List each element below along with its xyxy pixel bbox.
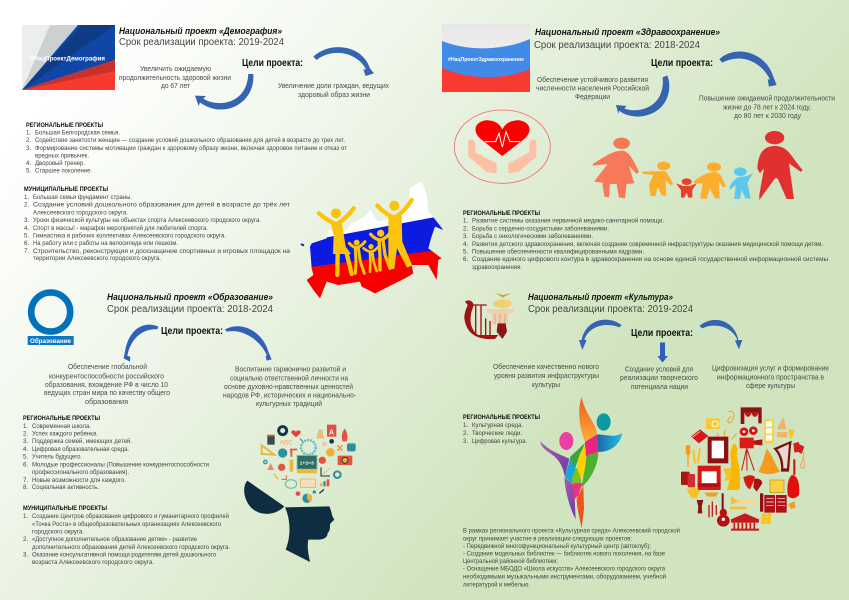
regional projects list: 2.	[23, 431, 28, 438]
goal: left: Обеспечение устойчивого развития	[537, 75, 648, 84]
municipal projects list: «Доступное дополнительное образование детям» - развитие	[32, 536, 198, 543]
illustration: culture icons circle	[681, 407, 805, 531]
goal: left: Обеспечение глобальной	[68, 362, 147, 371]
regional projects list: 1.	[463, 218, 468, 225]
municipal projects list: Спорт в массы! - марафон мероприятий для любителей спорта.	[33, 225, 208, 232]
goal: right: культурных традиций	[256, 399, 322, 408]
regional projects list: 3.	[26, 145, 31, 152]
municipal projects list: территории Алексеевского городского округа.	[33, 255, 161, 262]
regional projects list: Развития детского здравоохранения, включая создание современной инфраструктуры оказания медицинской помощи детям.	[472, 241, 823, 248]
regional projects list: 1.	[463, 422, 468, 429]
illustration: family	[593, 131, 803, 200]
regional projects list: 4.	[26, 160, 31, 167]
municipal projects list: Создание условий дошкольного образования для детей в возрасте до трёх лет	[33, 202, 290, 209]
regional projects list: 3.	[463, 233, 468, 240]
regional projects list: 6.	[463, 256, 468, 263]
goal: right: социально ответственной личности на	[230, 374, 349, 382]
arrow: to right goal	[699, 320, 742, 349]
municipal projects list: возраста Алексеевского городского округа.	[32, 559, 154, 566]
goal: left	[44, 362, 170, 406]
regional projects list: Цифровая культура.	[472, 438, 527, 445]
goals heading: Цели проекта:	[242, 58, 303, 69]
arrow: to right goal	[719, 51, 777, 87]
text: culture environment projects: округ принимает участие в реализации следующих проектов:	[463, 536, 632, 542]
icon: culture logo lyre and column	[464, 293, 514, 339]
goal: right	[278, 81, 389, 99]
goal: right	[699, 94, 835, 120]
municipal projects list: 7.	[24, 248, 29, 255]
regional projects list: 3.	[463, 438, 468, 445]
goal: middle	[620, 364, 698, 391]
municipal projects list: Оказание консультативной помощи родителям детей дошкольного	[32, 552, 217, 558]
regional projects list: 4.	[463, 241, 468, 248]
arrow: to right goal	[313, 47, 374, 76]
municipal projects list: На работу или с работы на велосипеде или пешком.	[33, 240, 178, 247]
goal: left	[493, 362, 599, 389]
goal: left: культуры	[532, 380, 560, 389]
goal: left: численности населения Российской	[536, 84, 649, 92]
illustration: open head with education icons: A	[329, 430, 334, 437]
regional projects list: 5.	[23, 454, 28, 460]
text: culture environment projects: необходимыми музыкальными инструментами, оборудованием, учебной	[463, 574, 667, 581]
text: culture environment projects: - Передвижной многофункциональный культурный центр (автоклуб);	[463, 543, 651, 550]
goal: middle: Создание условий для	[625, 364, 693, 374]
goal: right: Повышение ожидаемой продолжительности	[699, 94, 835, 102]
regional projects list: Учитель будущего.	[32, 454, 82, 460]
regional projects list: Развитие системы оказания первичной медико-санитарной помощи.	[472, 218, 664, 225]
image: healthcare flag banner: #НацПроектЗдравоохранение	[448, 57, 524, 63]
municipal projects list: «Точка Роста» в общеобразовательных организациях Алексеевского	[32, 521, 222, 528]
goal: left: Обеспечение качественно нового	[493, 362, 599, 371]
goal: left: образования, вхождение РФ в число 10	[45, 380, 168, 389]
regional projects list: 1.	[23, 423, 28, 430]
goal: left: ведущих стран мира по качеству общего	[44, 388, 170, 397]
goal: left: образования	[85, 397, 128, 406]
regional projects list: профессионального образования).	[32, 469, 129, 476]
heading: culture: Национальный проект «Культура»	[528, 292, 674, 303]
regional projects list: 6.	[23, 462, 28, 468]
goal: left	[536, 75, 649, 101]
project period: Срок реализации проекта: 2019-2024	[528, 304, 693, 315]
regional projects list: 2.	[463, 430, 468, 437]
regional projects list: Повышение обеспеченности квалифицированными кадрами.	[472, 248, 644, 256]
regional projects list	[463, 210, 829, 271]
municipal projects list: 1.	[23, 513, 28, 520]
regional projects list: здравоохранения.	[472, 264, 522, 271]
illustration: open head with education icons: ABC	[280, 440, 293, 447]
heading: demography: Национальный проект «Демография»	[119, 26, 283, 37]
text: culture environment projects: В рамках регионального проекта «Культурная среда» Алексеевский городской	[463, 528, 681, 535]
regional projects list	[26, 122, 347, 175]
goal: left: Увеличить ожидаемую	[140, 64, 211, 73]
text: culture environment projects: Центральной районной библиотеки;	[463, 558, 558, 565]
regional projects list: Борьба с сердечно-сосудистыми заболеваниями.	[472, 226, 609, 233]
regional projects list: Содействие занятости женщин — создание условий дошкольного образования для детей в возрасте до трех лет.	[35, 137, 345, 144]
municipal projects list: Большая семья фундамент страны.	[33, 194, 132, 201]
goal: left: уровня развития инфраструктуры	[494, 371, 599, 380]
regional projects list: 2.	[26, 137, 31, 144]
text: culture environment projects: - Создание модельных библиотек — библиотек нового поколения, на базе	[463, 551, 666, 558]
municipal projects list: 4.	[24, 225, 29, 232]
regional projects list: Большая Белгородская семья.	[35, 130, 120, 136]
municipal projects list: 2.	[23, 536, 28, 543]
panel: education	[23, 292, 357, 566]
regional projects list: Дворовый тренер.	[35, 160, 85, 167]
regional projects list: Борьба с онкологическими заболеваниями.	[472, 233, 593, 240]
municipal projects list: 3.	[24, 217, 29, 224]
regional projects list: Новые возможности для каждого.	[32, 477, 126, 484]
regional projects list: 7.	[23, 477, 28, 484]
goal: middle: реализации творческого	[620, 373, 698, 382]
regional projects list: Молодые профессионалы (Повышение конкурентоспособности	[32, 462, 210, 468]
text: culture environment projects: - Оснащение МБОДО «Школа искусств» Алексеевского городского округа	[463, 566, 666, 573]
goal: right: основе духовно-нравственных ценностей	[224, 382, 353, 391]
regional projects list: Культурная среда.	[472, 422, 523, 429]
municipal projects list: Гимнастика в рабочих коллективах Алексеевского городского округа.	[33, 232, 226, 240]
regional projects list: Цифровая образовательная среда.	[32, 446, 129, 453]
arrow: to right goal	[225, 326, 272, 361]
municipal projects list: 2.	[24, 202, 29, 209]
municipal projects list: 6.	[24, 240, 29, 247]
goal: right: жизни до 78 лет к 2024 году,	[723, 102, 811, 112]
panel: demography	[22, 25, 450, 300]
regional projects list: Поддержка семей, имеющих детей.	[32, 438, 132, 445]
project period: Срок реализации проекта: 2019-2024	[119, 37, 284, 48]
icon: education logo	[28, 292, 74, 345]
regional projects list: Старшее поколение.	[35, 168, 92, 175]
regional projects list: Успех каждого ребенка.	[32, 431, 98, 438]
panel: healthcare	[442, 24, 835, 271]
regional projects list: Современная школа.	[32, 423, 91, 430]
arrow: to left goal	[616, 75, 669, 117]
heading: education: Национальный проект «Образование»	[107, 292, 274, 303]
regional projects list: 2.	[463, 226, 468, 233]
goal: left: продолжительность здоровой жизни	[119, 73, 231, 82]
regional projects list: Создание единого цифрового контура в здравоохранении на основе единой государственной информационной системы	[472, 256, 829, 263]
municipal projects list: дополнительного образования детей Алексеевского городского округа.	[32, 544, 230, 551]
goal: right: Цифровизация услуг и формирование	[712, 364, 829, 372]
icon: heart in hands	[454, 110, 550, 183]
goal: left: до 67 лет	[161, 81, 191, 90]
arrow: to left goal	[195, 74, 253, 110]
heading: healthcare: Национальный проект «Здравоохранение»	[535, 27, 721, 38]
regional projects list: Творческие люди.	[472, 430, 522, 437]
regional projects list: РЕГИОНАЛЬНЫЕ ПРОЕКТЫ	[23, 415, 100, 422]
municipal projects list: Создание Центров образования цифрового и гуманитарного профилей	[32, 513, 230, 520]
municipal projects list: Уроки физической культуры на объектах спорта Алексеевского городского округа.	[33, 217, 261, 224]
regional projects list	[463, 414, 540, 445]
municipal projects list: 5.	[24, 232, 29, 240]
illustration: open head with education icons	[244, 425, 356, 562]
arrow: to left goal	[124, 325, 158, 362]
illustration: Russia map with family	[300, 182, 444, 298]
arrow: to down goal	[658, 342, 668, 362]
regional projects list: 4.	[23, 446, 28, 453]
goal: right: народов РФ, исторических и национально-	[223, 390, 357, 400]
regional projects list: 3.	[23, 438, 28, 445]
panel: culture	[463, 292, 829, 588]
image: demography flag banner: #НацПроектДемография	[30, 56, 105, 62]
text: culture environment projects	[463, 528, 681, 588]
goal: right	[712, 364, 829, 390]
goal: right: Увеличение доли граждан, ведущих	[278, 81, 389, 90]
illustration: open head with education icons: 1+2=3	[300, 460, 314, 466]
municipal projects list	[23, 505, 230, 566]
municipal projects list: МУНИЦИПАЛЬНЫЕ ПРОЕКТЫ	[23, 505, 107, 512]
regional projects list: 5.	[463, 248, 468, 256]
regional projects list: 8.	[23, 484, 28, 491]
municipal projects list	[24, 186, 291, 262]
regional projects list: 5.	[26, 168, 31, 175]
goal: right: Воспитание гармонично развитой и	[235, 364, 346, 374]
goal: left	[119, 64, 231, 90]
regional projects list	[23, 415, 210, 491]
municipal projects list: городского округа.	[32, 529, 84, 536]
regional projects list: РЕГИОНАЛЬНЫЕ ПРОЕКТЫ	[463, 414, 540, 421]
regional projects list: РЕГИОНАЛЬНЫЕ ПРОЕКТЫ	[26, 122, 103, 129]
goals heading: Цели проекта:	[161, 326, 223, 337]
project period: Срок реализации проекта: 2018-2024	[534, 40, 700, 51]
illustration: dancers	[540, 397, 622, 529]
municipal projects list: 1.	[24, 194, 29, 201]
image: healthcare flag banner	[442, 24, 530, 92]
regional projects list: Социальная активность.	[32, 484, 99, 491]
goals heading: Цели проекта:	[631, 328, 693, 339]
municipal projects list: Алексеевского городского округа.	[33, 210, 128, 216]
arrow: to left goal	[579, 320, 622, 350]
project period: Срок реализации проекта: 2018-2024	[107, 304, 273, 315]
goals heading: Цели проекта:	[651, 58, 713, 69]
goal: middle: потенциала нации	[631, 382, 688, 391]
image: demography flag banner	[22, 25, 115, 90]
municipal projects list: Строительство, реконструкция и дооснащение спортивных и игровых площадок на	[33, 248, 291, 255]
icon: education logo: Образование	[30, 337, 71, 345]
goal: left: Федерации	[575, 92, 610, 101]
goal: right	[223, 364, 357, 408]
regional projects list: Формирование системы мотивации граждан к здоровому образу жизни, включая здоровое питание и отказ от	[35, 145, 347, 152]
regional projects list: вредных привычек.	[35, 152, 89, 160]
text: culture environment projects: литературой и мебелью.	[463, 581, 530, 588]
regional projects list: РЕГИОНАЛЬНЫЕ ПРОЕКТЫ	[463, 210, 540, 217]
regional projects list: 1.	[26, 130, 31, 136]
municipal projects list: МУНИЦИПАЛЬНЫЕ ПРОЕКТЫ	[24, 186, 108, 193]
goal: left: конкурентоспособности российского	[49, 372, 164, 380]
goal: right: до 80 лет к 2030 году	[734, 111, 801, 120]
goal: right: информационного пространства в	[717, 372, 824, 382]
goal: right: сфере культуры	[746, 381, 795, 390]
municipal projects list: 3.	[23, 552, 28, 558]
goal: right: здоровый образ жизни	[298, 90, 370, 99]
